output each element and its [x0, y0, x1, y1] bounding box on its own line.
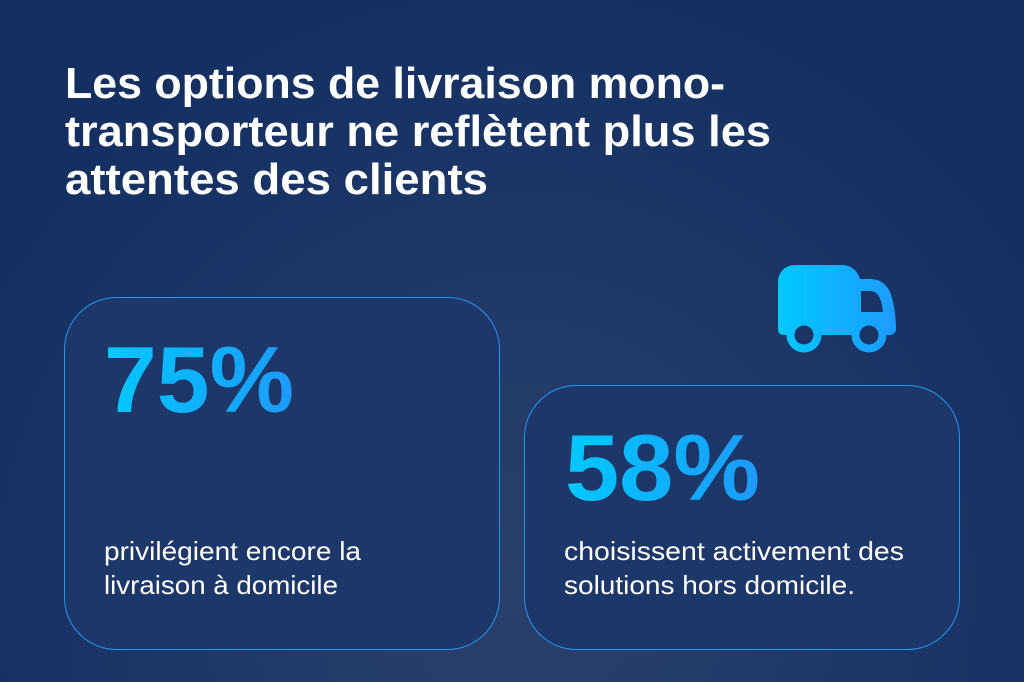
title: Les options de livraison mono- — [65, 59, 725, 108]
description: home delivery: privilégient encore la — [104, 536, 362, 566]
title — [65, 59, 771, 204]
card background — [64, 298, 500, 650]
title: transporteur ne reflètent plus les — [65, 107, 771, 156]
card background — [524, 386, 960, 650]
description: home delivery — [104, 536, 362, 600]
description: out-of-home solutions — [564, 536, 904, 600]
number: 58%: 58% — [565, 415, 760, 520]
description: out-of-home solutions: solutions hors domicile. — [564, 570, 855, 600]
icon: delivery truck — [778, 265, 896, 352]
description: home delivery: livraison à domicile — [104, 570, 338, 600]
panel: 75% statistic — [64, 298, 500, 650]
number: 75%: 75% — [104, 327, 294, 432]
title: attentes des clients — [65, 155, 488, 204]
description: out-of-home solutions: choisissent activement des — [564, 536, 904, 566]
panel: 58% statistic — [524, 386, 960, 650]
